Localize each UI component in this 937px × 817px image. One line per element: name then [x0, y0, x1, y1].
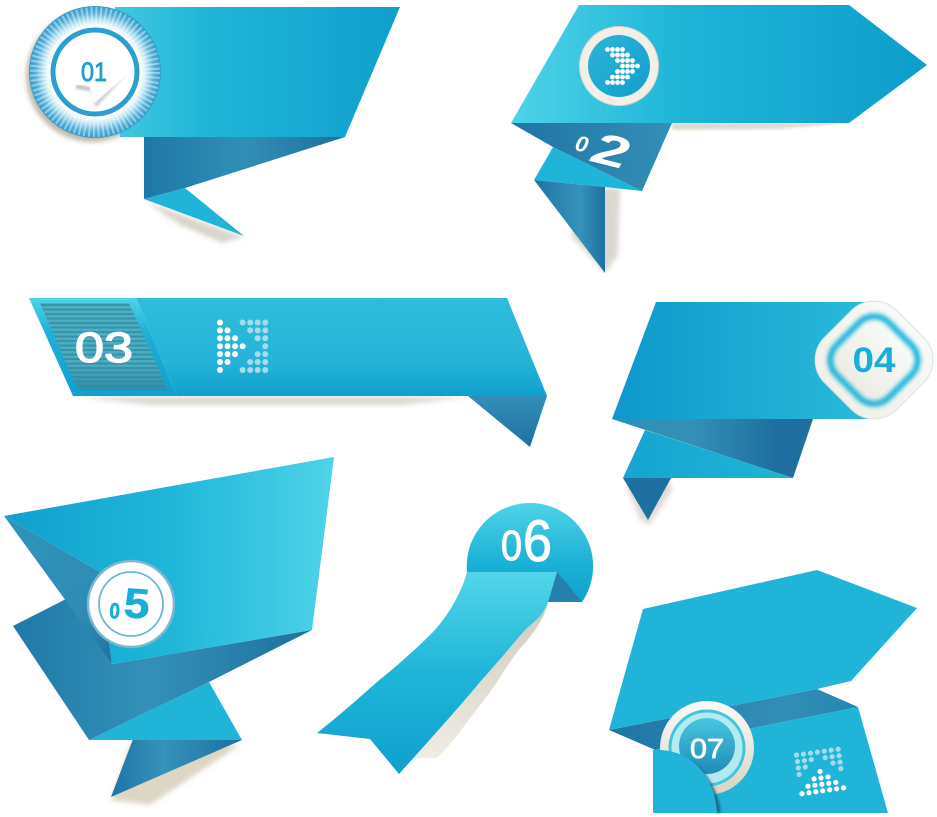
- band shadow: [672, 123, 849, 130]
- pale dots: [794, 746, 844, 777]
- striped number plate: [40, 303, 168, 390]
- inner diamond glow: [822, 308, 926, 412]
- number 05: [109, 580, 151, 628]
- dotted icon: [794, 746, 847, 797]
- number 02: 0: [573, 131, 591, 158]
- numbered badge: [29, 6, 161, 138]
- dark fold: [144, 137, 345, 199]
- pale frame dots: [240, 320, 268, 373]
- main band: [4, 457, 334, 664]
- banner 03: [29, 298, 547, 447]
- white dots: [796, 766, 847, 797]
- radial ticks: [39, 16, 151, 128]
- diamond badge: [802, 288, 937, 432]
- badge shadow: [26, 10, 158, 142]
- main band: [612, 302, 870, 419]
- tail: [623, 478, 671, 520]
- badge inner ring: [99, 572, 163, 636]
- badge rim: [660, 701, 754, 795]
- arrow tag: [72, 38, 128, 103]
- banner 05: [4, 457, 334, 805]
- cyan ring: [670, 711, 744, 785]
- arrow tag shadow: [76, 72, 129, 107]
- main band: [115, 7, 400, 137]
- dotted chevron: [605, 47, 640, 85]
- number 04: 04: [852, 341, 896, 380]
- badge disc: [29, 6, 161, 138]
- badge centre: [588, 35, 650, 97]
- number badge: [88, 561, 174, 647]
- light fold: [623, 430, 793, 478]
- light fold: [534, 147, 642, 191]
- corner flap shadow: [690, 760, 721, 813]
- outer rounded diamond: [802, 288, 937, 432]
- arrow badge: [580, 26, 658, 106]
- banner 06: [317, 503, 593, 774]
- badge rim: [88, 561, 174, 647]
- number 02: 2: [587, 122, 634, 179]
- light fold: [89, 682, 242, 740]
- number 03: 03: [75, 324, 133, 372]
- number 05: 5: [122, 580, 151, 628]
- dark fold: [612, 419, 813, 478]
- tail: [534, 180, 605, 273]
- banner 04: [612, 288, 937, 525]
- dotted arrow icon: [217, 320, 268, 373]
- tail shadow: [111, 745, 240, 805]
- inner diamond face: [818, 304, 930, 416]
- white centre with blue ring: [53, 30, 137, 114]
- number 06: 6: [523, 509, 552, 574]
- tail shadow: [570, 188, 620, 273]
- number 06: [501, 509, 552, 574]
- plate: [40, 303, 168, 390]
- number 06: 0: [501, 522, 522, 570]
- banner 01: [26, 6, 400, 243]
- dark fold: [511, 123, 672, 191]
- number 01: 01: [81, 57, 107, 87]
- band shadow: [80, 397, 470, 405]
- main arrow band: [511, 5, 927, 123]
- tail: [111, 739, 242, 797]
- button face: [679, 718, 735, 774]
- left flap: [29, 298, 177, 396]
- lower panel: [653, 707, 888, 813]
- banner 02: [511, 5, 927, 273]
- banner 07: [609, 570, 917, 813]
- inner dark fold: [4, 516, 112, 664]
- number 07: 07: [690, 733, 724, 764]
- button badge: [660, 701, 754, 795]
- fold triangle: [548, 572, 582, 602]
- tail shadow: [626, 480, 672, 525]
- ribbon shadow: [412, 602, 548, 758]
- white triangle dots: [217, 320, 246, 373]
- curved ribbon: [317, 572, 557, 774]
- tail shadow: [146, 202, 244, 243]
- dark fold: [609, 689, 858, 752]
- lower tail triangle: [144, 188, 244, 236]
- upper band: [609, 570, 917, 730]
- number 05: 0: [109, 600, 121, 624]
- main band: [136, 298, 547, 396]
- corner flap: [653, 750, 717, 813]
- dark fold: [468, 396, 547, 447]
- badge ring: [580, 26, 658, 106]
- lower dark band: [13, 599, 312, 740]
- plate stripes: [40, 303, 168, 390]
- half circle tab: [467, 503, 593, 602]
